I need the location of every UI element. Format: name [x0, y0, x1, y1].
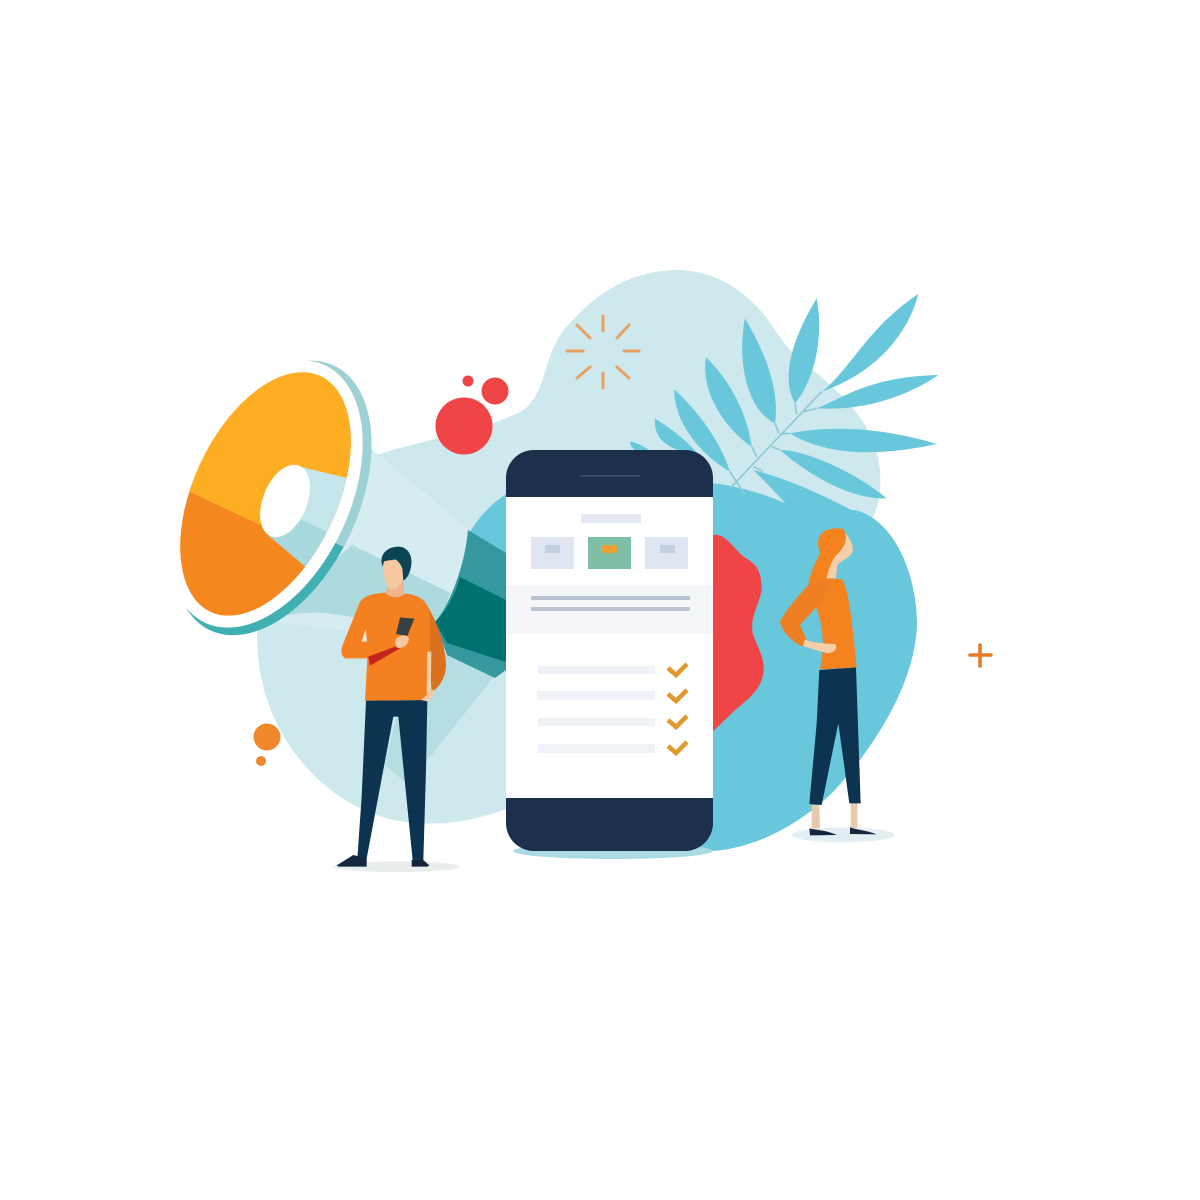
leaf 5 — [753, 470, 870, 520]
phone screen — [506, 497, 713, 798]
sleeve shadow — [368, 647, 400, 666]
megaphone white ring — [128, 329, 402, 659]
leaf 1 — [822, 294, 918, 392]
man hand on hip — [421, 689, 435, 702]
orange dots — [254, 724, 280, 766]
sunburst — [567, 316, 639, 388]
woman face and neck — [824, 533, 853, 578]
woman shadow — [792, 828, 895, 842]
phone — [506, 450, 713, 851]
man sweater — [342, 593, 430, 701]
megaphone bell — [180, 372, 351, 616]
megaphone rim lower — [132, 329, 412, 667]
leaf 11 — [630, 442, 657, 457]
woman trousers — [809, 667, 861, 805]
megaphone cone — [260, 440, 470, 655]
leaf 6 — [789, 298, 819, 403]
leaf 2 — [817, 375, 938, 409]
check marks — [668, 664, 687, 753]
checklist — [537, 664, 687, 753]
megaphone — [180, 360, 506, 678]
woman hand — [803, 639, 836, 653]
man trousers — [357, 700, 427, 860]
woman shoes — [809, 827, 877, 835]
man face — [383, 559, 403, 589]
leaf 7 — [742, 318, 776, 423]
woman — [780, 528, 895, 842]
woman arm — [780, 579, 830, 647]
illustration — [180, 270, 993, 872]
man neck — [386, 580, 404, 597]
megaphone handle — [435, 530, 506, 678]
woman legs — [812, 803, 857, 828]
man right arm — [427, 605, 446, 692]
phone speaker — [580, 475, 640, 476]
megaphone rim upper — [311, 360, 372, 547]
man shadow — [333, 861, 460, 872]
plus sign — [970, 645, 991, 666]
leaf 12 — [713, 483, 798, 510]
man — [333, 547, 460, 872]
cone lower band — [262, 545, 450, 658]
light background blob — [257, 270, 880, 824]
man phone — [396, 617, 414, 636]
phone body — [506, 450, 713, 851]
arm gap — [361, 629, 367, 642]
red blob — [713, 535, 764, 732]
palm leaves — [630, 294, 938, 520]
card right — [645, 537, 688, 569]
body and arm gap — [427, 652, 431, 693]
leaf 8 — [705, 357, 752, 447]
leaf stem — [730, 392, 822, 495]
megaphone hole — [250, 458, 320, 544]
leaf 3 — [790, 429, 937, 452]
man hair — [381, 547, 412, 581]
leaf 9 — [674, 389, 730, 472]
man hand — [395, 635, 409, 648]
card left — [531, 537, 574, 569]
teal background blob — [470, 483, 917, 851]
red circles — [436, 376, 508, 454]
text band — [506, 585, 713, 634]
leaf 10 — [655, 418, 700, 457]
screen title — [581, 514, 641, 523]
darker wedge between the legs — [385, 650, 495, 782]
leaf 4 — [780, 450, 887, 498]
man shoes — [337, 855, 429, 867]
woman top — [815, 578, 857, 669]
woman hair — [808, 528, 846, 590]
phone shadow — [513, 843, 713, 859]
card center — [588, 537, 631, 569]
